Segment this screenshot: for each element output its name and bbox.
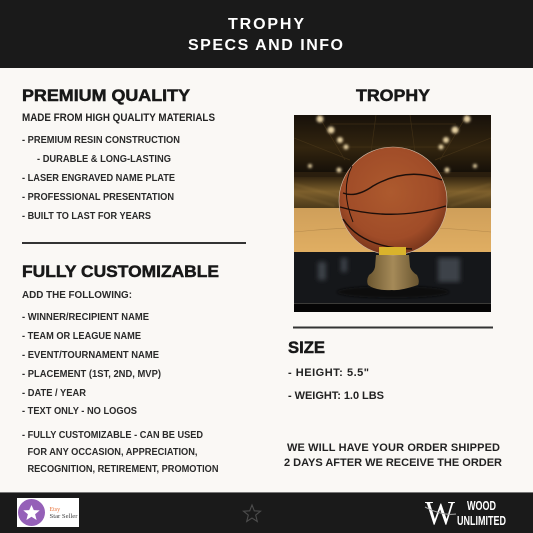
title: TROPHY bbox=[228, 16, 304, 33]
panel: premium quality bbox=[22, 86, 215, 222]
shipping note: WE WILL HAVE YOUR ORDER SHIPPED bbox=[287, 442, 500, 454]
text: occasions note: FOR ANY OCCASION, APPRECIATION, bbox=[28, 447, 198, 458]
list: customization options: - TEAM OR LEAGUE NAME bbox=[22, 331, 141, 342]
footer band bbox=[0, 492, 533, 533]
list: quality features: - PREMIUM RESIN CONSTRUCTION bbox=[22, 135, 180, 146]
list: customization options: - PLACEMENT (1ST, 2ND, MVP) bbox=[22, 369, 161, 380]
logo: wood unlimited: WOOD bbox=[467, 499, 496, 513]
shipping note: 2 DAYS AFTER WE RECEIVE THE ORDER bbox=[284, 457, 502, 469]
list: quality features: - DURABLE & LONG-LASTING bbox=[37, 154, 171, 165]
text: add the following: ADD THE FOLLOWING: bbox=[22, 290, 132, 301]
list: quality features bbox=[22, 135, 180, 222]
basketball bbox=[339, 147, 447, 255]
name plate bbox=[379, 247, 406, 255]
trophy photo bbox=[294, 115, 491, 312]
text: occasions note: - FULLY CUSTOMIZABLE - CAN BE USED bbox=[22, 430, 203, 441]
list: quality features: - BUILT TO LAST FOR YEARS bbox=[22, 211, 151, 222]
list: customization options: - TEXT ONLY - NO LOGOS bbox=[22, 406, 137, 417]
black table bbox=[294, 252, 491, 312]
logo: wood unlimited: W bbox=[425, 495, 456, 532]
heading: fully customizable: FULLY CUSTOMIZABLE bbox=[22, 262, 219, 281]
arena background bbox=[294, 115, 491, 252]
list: customization options: - DATE / YEAR bbox=[22, 388, 87, 399]
badge: etsy star seller: Star Seller bbox=[50, 514, 78, 520]
panel: size bbox=[288, 338, 384, 402]
title: SPECS AND INFO bbox=[188, 37, 343, 54]
logo: wood unlimited: UNLIMITED bbox=[457, 514, 506, 528]
text: occasions note bbox=[22, 430, 218, 475]
list: customization options bbox=[22, 312, 161, 417]
heading: trophy: TROPHY bbox=[356, 86, 431, 105]
list: quality features: - PROFESSIONAL PRESENTATION bbox=[22, 192, 174, 203]
badge: etsy star seller: Etsy bbox=[50, 507, 60, 513]
text: materials intro: MADE FROM HIGH QUALITY MATERIALS bbox=[22, 112, 215, 124]
header band bbox=[0, 0, 533, 68]
heading: size: SIZE bbox=[288, 338, 325, 357]
list: quality features: - LASER ENGRAVED NAME PLATE bbox=[22, 173, 175, 184]
list: customization options: - EVENT/TOURNAMENT NAME bbox=[22, 350, 159, 361]
heading: premium quality: PREMIUM QUALITY bbox=[22, 86, 191, 105]
icon: star bbox=[244, 505, 260, 522]
shipping note bbox=[284, 442, 502, 469]
trophy base bbox=[367, 255, 419, 290]
title bbox=[188, 16, 343, 54]
text: occasions note: RECOGNITION, RETIREMENT, PROMOTION bbox=[28, 464, 218, 475]
logo: wood unlimited bbox=[425, 495, 506, 532]
badge: etsy star seller bbox=[17, 498, 79, 527]
panel: fully customizable bbox=[22, 262, 219, 475]
text: height: - HEIGHT: 5.5" bbox=[288, 367, 369, 379]
list: customization options: - WINNER/RECIPIENT NAME bbox=[22, 312, 149, 323]
text: weight: - WEIGHT: 1.0 LBS bbox=[288, 390, 384, 402]
